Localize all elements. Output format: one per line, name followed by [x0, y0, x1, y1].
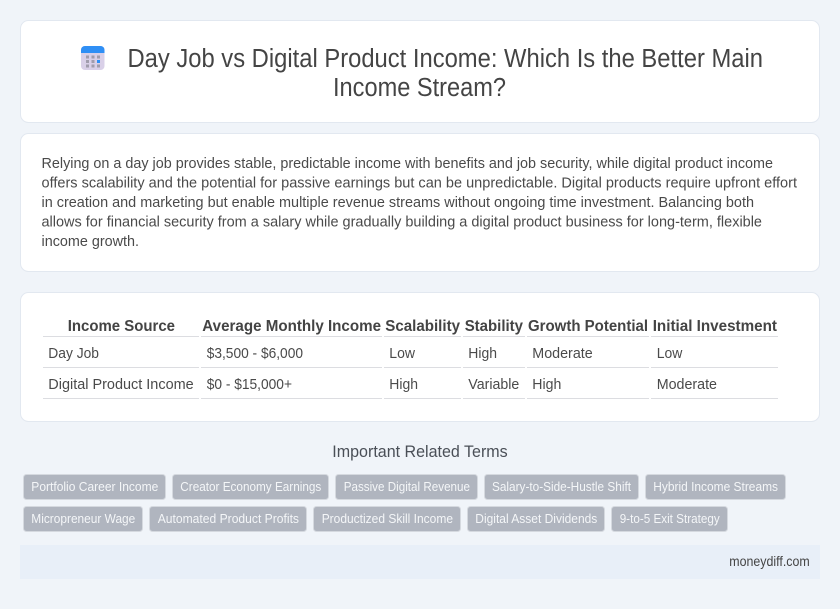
tag: Automated Product Profits	[150, 506, 306, 532]
tag: Salary-to-Side-Hustle Shift	[484, 474, 638, 500]
title	[128, 45, 763, 102]
panel: summary text	[20, 134, 820, 272]
title: Day Job vs Digital Product Income: Which Is the Better Main	[128, 45, 763, 73]
tag: Hybrid Income Streams: Hybrid Income Streams	[653, 479, 778, 494]
table header row: Scalability	[385, 318, 460, 335]
table header row: Stability	[465, 318, 523, 335]
table row: day job: Day Job	[48, 346, 99, 362]
table row: digital product income: High	[532, 377, 561, 393]
table row: digital product income: Moderate	[657, 377, 717, 393]
table row: day job	[48, 346, 683, 362]
title: Income Stream?	[333, 74, 506, 102]
text block: summary paragraph: allows for financial security from a salary while gradually building a digital product business for long-term, flexible	[42, 214, 762, 230]
tag: Micropreneur Wage: Micropreneur Wage	[31, 511, 135, 526]
table header row: Initial Investment	[653, 318, 778, 335]
tags: related terms	[24, 474, 786, 532]
heading: important related terms: Important Related Terms	[332, 443, 508, 461]
table header row: Growth Potential	[528, 318, 648, 335]
tag: Digital Asset Dividends: Digital Asset Dividends	[475, 511, 598, 526]
tag: Productized Skill Income	[314, 506, 460, 532]
tag: Salary-to-Side-Hustle Shift: Salary-to-Side-Hustle Shift	[492, 479, 631, 494]
tag: Automated Product Profits: Automated Product Profits	[158, 511, 299, 526]
table row: digital product income: Variable	[468, 377, 519, 393]
tag: Creator Economy Earnings: Creator Economy Earnings	[180, 479, 322, 494]
panel: comparison table	[20, 292, 820, 422]
tag: Digital Asset Dividends	[468, 506, 604, 532]
table row: digital product income: Digital Product Income	[48, 377, 194, 393]
table row: day job: High	[468, 346, 497, 362]
tag: Portfolio Career Income	[24, 474, 166, 500]
table header row: Average Monthly Income	[202, 318, 381, 335]
tag: Productized Skill Income: Productized Skill Income	[322, 511, 453, 526]
tag: Hybrid Income Streams	[646, 474, 786, 500]
panel: title header	[20, 20, 820, 122]
tag: Micropreneur Wage	[24, 506, 142, 532]
table row: day job: Low	[657, 346, 683, 362]
table header row	[68, 318, 778, 335]
text block: summary paragraph: income growth.	[42, 234, 139, 250]
text block: summary paragraph	[42, 156, 797, 250]
footer source: moneydiff.com	[729, 554, 810, 569]
tag: 9-to-5 Exit Strategy	[612, 506, 728, 532]
tag: Passive Digital Revenue: Passive Digital Revenue	[344, 479, 470, 494]
table header row: Income Source	[68, 318, 175, 335]
tag: 9-to-5 Exit Strategy: 9-to-5 Exit Strategy	[620, 511, 720, 526]
footer bar	[20, 545, 820, 579]
table row: day job: Moderate	[532, 346, 593, 362]
text block: summary paragraph: in creation and marketing but enable multiple revenue streams without ongoing time investment. Balancing both	[42, 195, 754, 211]
table row: day job: Low	[389, 346, 415, 362]
tag: Creator Economy Earnings	[172, 474, 328, 500]
text block: summary paragraph: offers scalability and the potential for passive earnings but can be unpredictable. Digital products require upfront effort	[42, 176, 797, 192]
tag: Portfolio Career Income: Portfolio Career Income	[31, 479, 158, 494]
table row: digital product income	[48, 377, 717, 393]
text block: summary paragraph: Relying on a day job provides stable, predictable income with benefits and job security, while digital product income	[42, 156, 773, 172]
tag: Passive Digital Revenue	[336, 474, 478, 500]
table row: day job: $3,500 - $6,000	[207, 346, 303, 362]
table row: digital product income: High	[389, 377, 418, 393]
table row: digital product income: $0 - $15,000+	[207, 377, 292, 393]
icon: calendar	[81, 46, 104, 70]
